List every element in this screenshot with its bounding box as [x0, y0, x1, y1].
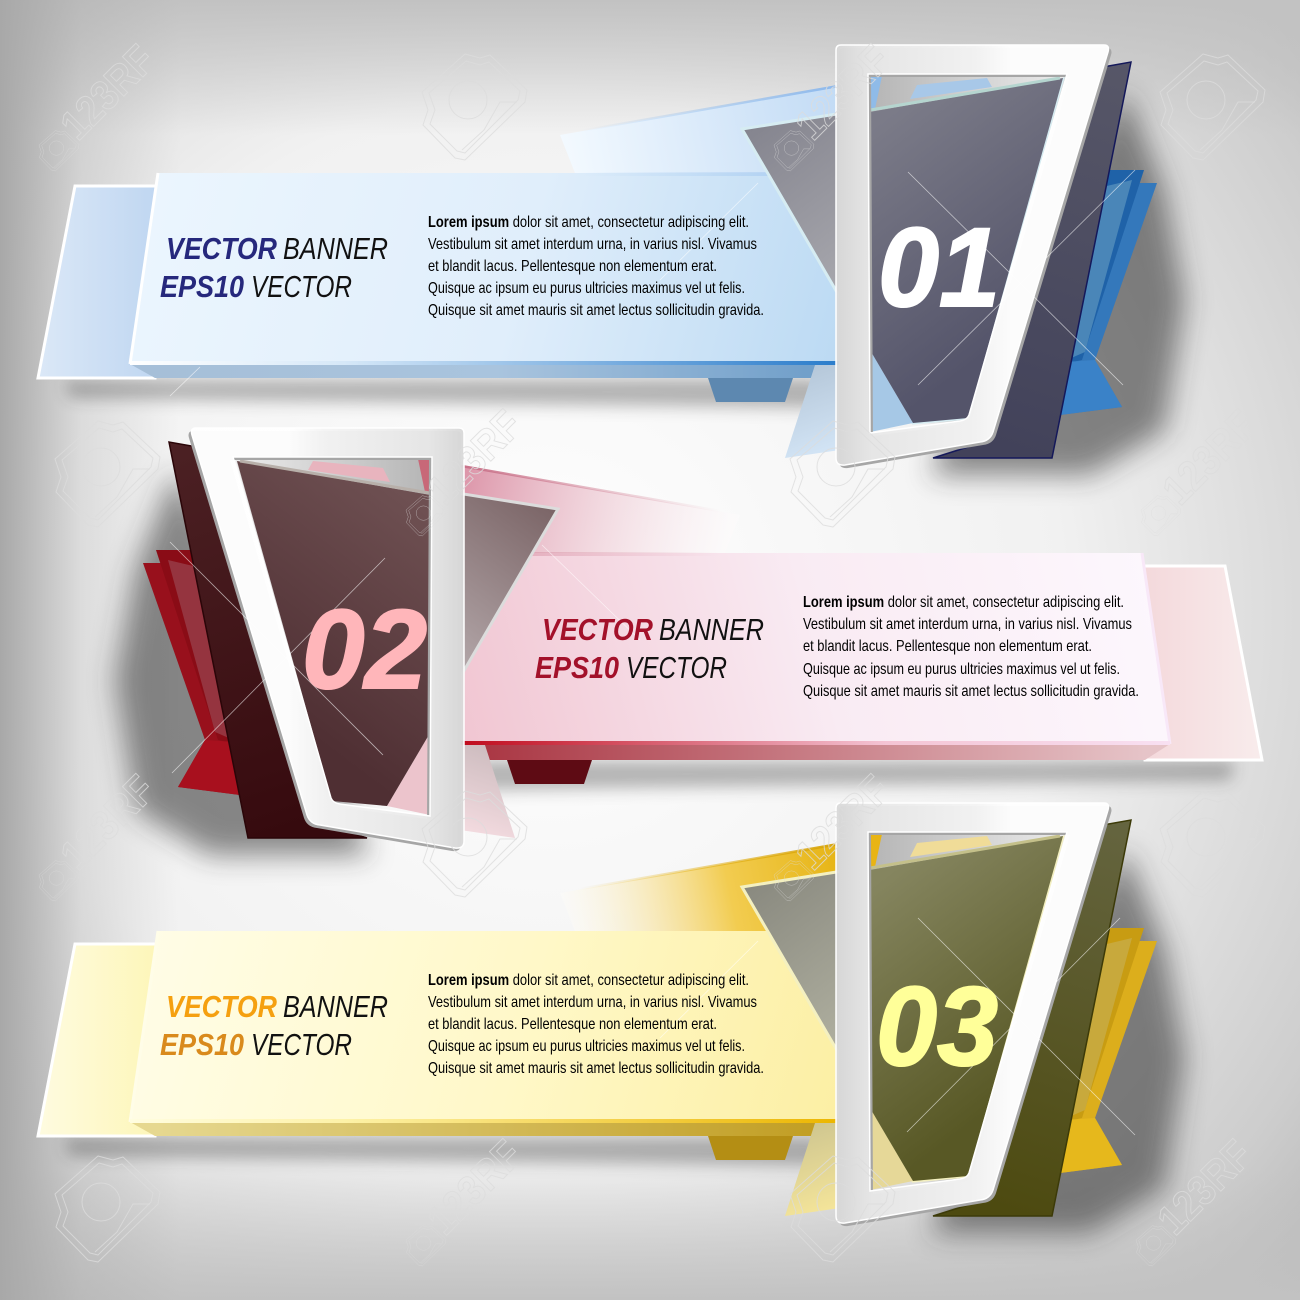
window tab [910, 836, 992, 857]
thin lines banner 2 [170, 542, 640, 773]
gray triangle [742, 78, 1063, 423]
back dark panel [169, 442, 367, 838]
text block: banner 1 [428, 214, 764, 319]
flaps: red [143, 550, 240, 795]
text block: banner 3: Lorem ipsum dolor sit amet, consectetur adipiscing elit. [428, 972, 749, 989]
front banner left edge [130, 173, 158, 364]
heading: banner 1 [160, 231, 388, 304]
dark front panel [237, 461, 430, 806]
gray triangle [742, 836, 1063, 1181]
window tab [910, 78, 992, 99]
heading: banner 1: EPS10 [160, 269, 244, 304]
text block: banner 1: Lorem ipsum dolor sit amet, consectetur adipiscing elit. [428, 214, 749, 231]
text block: banner 3: et blandit lacus. Pellentesque non elementum erat. [428, 1016, 717, 1033]
window sliver [418, 459, 430, 493]
dark front panel [870, 836, 1063, 1181]
heading: banner 3: VECTOR [251, 1027, 352, 1062]
text block: banner 2: Lorem ipsum dolor sit amet, consectetur adipiscing elit. [803, 594, 1124, 611]
dark panel top edge [870, 78, 1060, 110]
panel: banner 3 shapes [38, 803, 1185, 1233]
gray triangle [237, 458, 558, 803]
text block: banner 1: et blandit lacus. Pellentesque non elementum erat. [428, 258, 717, 275]
thin lines banner 3 [660, 918, 1135, 1135]
text block: banner 3: Vestibulum sit amet interdum urna, in varius nisl. Vivamus [428, 994, 757, 1011]
panel: banner 2 frame [188, 428, 464, 851]
heading: banner 1: BANNER [283, 231, 388, 266]
front banner bottom edge [130, 361, 840, 365]
heading: banner 1: VECTOR [251, 269, 352, 304]
watermarks: 123RF [1153, 401, 1266, 513]
number 01: 01 [878, 205, 1000, 330]
dark front panel [870, 78, 1063, 423]
watermarks: 123RF [418, 1131, 531, 1243]
frame bevel [839, 48, 1112, 468]
back dark panel [933, 820, 1131, 1216]
front banner [460, 553, 1170, 744]
heading: banner 2: BANNER [659, 612, 764, 647]
lower glass triangle [785, 1123, 880, 1216]
window lower glass [870, 350, 913, 432]
top glass panel [560, 834, 882, 931]
lower glass triangle [420, 745, 515, 838]
white frame [836, 803, 1108, 1223]
top glass panel [418, 456, 740, 553]
text block: banner 3: Quisque sit amet mauris sit amet lectus sollicitudin gravida. [428, 1060, 764, 1077]
watermarks: 123RF [418, 401, 531, 513]
watermarks: 123RF [51, 36, 164, 148]
text block: banner 1: Quisque sit amet mauris sit amet lectus sollicitudin gravida. [428, 302, 764, 319]
heading: banner 3: VECTOR [166, 989, 278, 1024]
panel: banner 2 shapes [115, 442, 1262, 855]
flaps: blue [1060, 170, 1157, 415]
shadow: banner 1 [65, 90, 1185, 475]
white frame [836, 45, 1108, 465]
white frame [192, 428, 464, 848]
front banner left edge [130, 931, 158, 1122]
back banner [1135, 566, 1262, 760]
number 03: 03 [876, 964, 998, 1089]
dark panel top edge [870, 836, 1060, 868]
lower strip [130, 1122, 840, 1136]
lower strip [130, 364, 840, 378]
window background [232, 457, 434, 495]
heading: banner 2: EPS10 [535, 650, 619, 685]
watermarks: 123RF [1148, 1131, 1261, 1243]
frame bevel [839, 806, 1112, 1226]
watermarks: 123RF [786, 766, 899, 878]
lower tab [708, 1136, 793, 1160]
flaps: yellow [1060, 928, 1157, 1173]
text block: banner 3: Quisque ac ipsum eu purus ultricies maximus vel ut felis. [428, 1038, 745, 1055]
lower tab [507, 760, 592, 784]
front banner bottom edge [130, 1119, 840, 1123]
thin lines banner 1 [170, 170, 1135, 396]
front banner [130, 173, 840, 364]
window tab [308, 461, 390, 482]
watermarks: 123RF [786, 36, 899, 148]
number 02: 02 [302, 587, 427, 712]
window lower glass [870, 1108, 913, 1190]
top glass edge [580, 84, 850, 131]
heading: banner 1: VECTOR [166, 231, 278, 266]
front banner bottom edge [460, 741, 1170, 745]
front banner left edge [1142, 553, 1170, 744]
window blue sliver [870, 76, 882, 110]
lower glass triangle [785, 365, 880, 458]
text block: banner 1: Quisque ac ipsum eu purus ultricies maximus vel ut felis. [428, 280, 745, 297]
window sliver [870, 834, 882, 868]
text block: banner 3 [428, 972, 764, 1077]
text block: banner 2: Vestibulum sit amet interdum urna, in varius nisl. Vivamus [803, 616, 1132, 633]
back banner [38, 186, 165, 378]
text block: banner 2 [803, 594, 1139, 700]
text block: banner 2: Quisque sit amet mauris sit amet lectus sollicitudin gravida. [803, 683, 1139, 700]
lower strip [460, 744, 1170, 760]
lower tab [708, 378, 793, 402]
heading: banner 2 [535, 612, 764, 685]
top glass panel [560, 76, 882, 173]
heading: banner 3 [160, 989, 388, 1062]
heading: banner 3: BANNER [283, 989, 388, 1024]
heading: banner 2: VECTOR [542, 612, 654, 647]
watermarks: 123RF [51, 766, 164, 878]
shadow: banner 3 [65, 848, 1185, 1233]
front banner top band [575, 172, 840, 176]
front banner [130, 931, 840, 1122]
window background [866, 74, 1068, 112]
shadow: banner 2 [115, 470, 1235, 855]
heading: banner 3: EPS10 [160, 1027, 244, 1062]
back banner [38, 944, 165, 1136]
text block: banner 1: Vestibulum sit amet interdum urna, in varius nisl. Vivamus [428, 236, 757, 253]
window background [866, 832, 1068, 870]
panel: banner 1 shapes [38, 45, 1185, 475]
top glass edge [450, 464, 720, 511]
back dark panel [933, 62, 1131, 458]
front banner top band [460, 552, 725, 556]
heading: banner 2: VECTOR [626, 650, 727, 685]
text block: banner 2: Quisque ac ipsum eu purus ultricies maximus vel ut felis. [803, 661, 1120, 678]
dark panel top edge [240, 461, 430, 493]
frame bevel [188, 431, 461, 851]
text block: banner 2: et blandit lacus. Pellentesque non elementum erat. [803, 638, 1092, 655]
window lower glass [387, 733, 430, 815]
top glass edge [580, 842, 850, 889]
